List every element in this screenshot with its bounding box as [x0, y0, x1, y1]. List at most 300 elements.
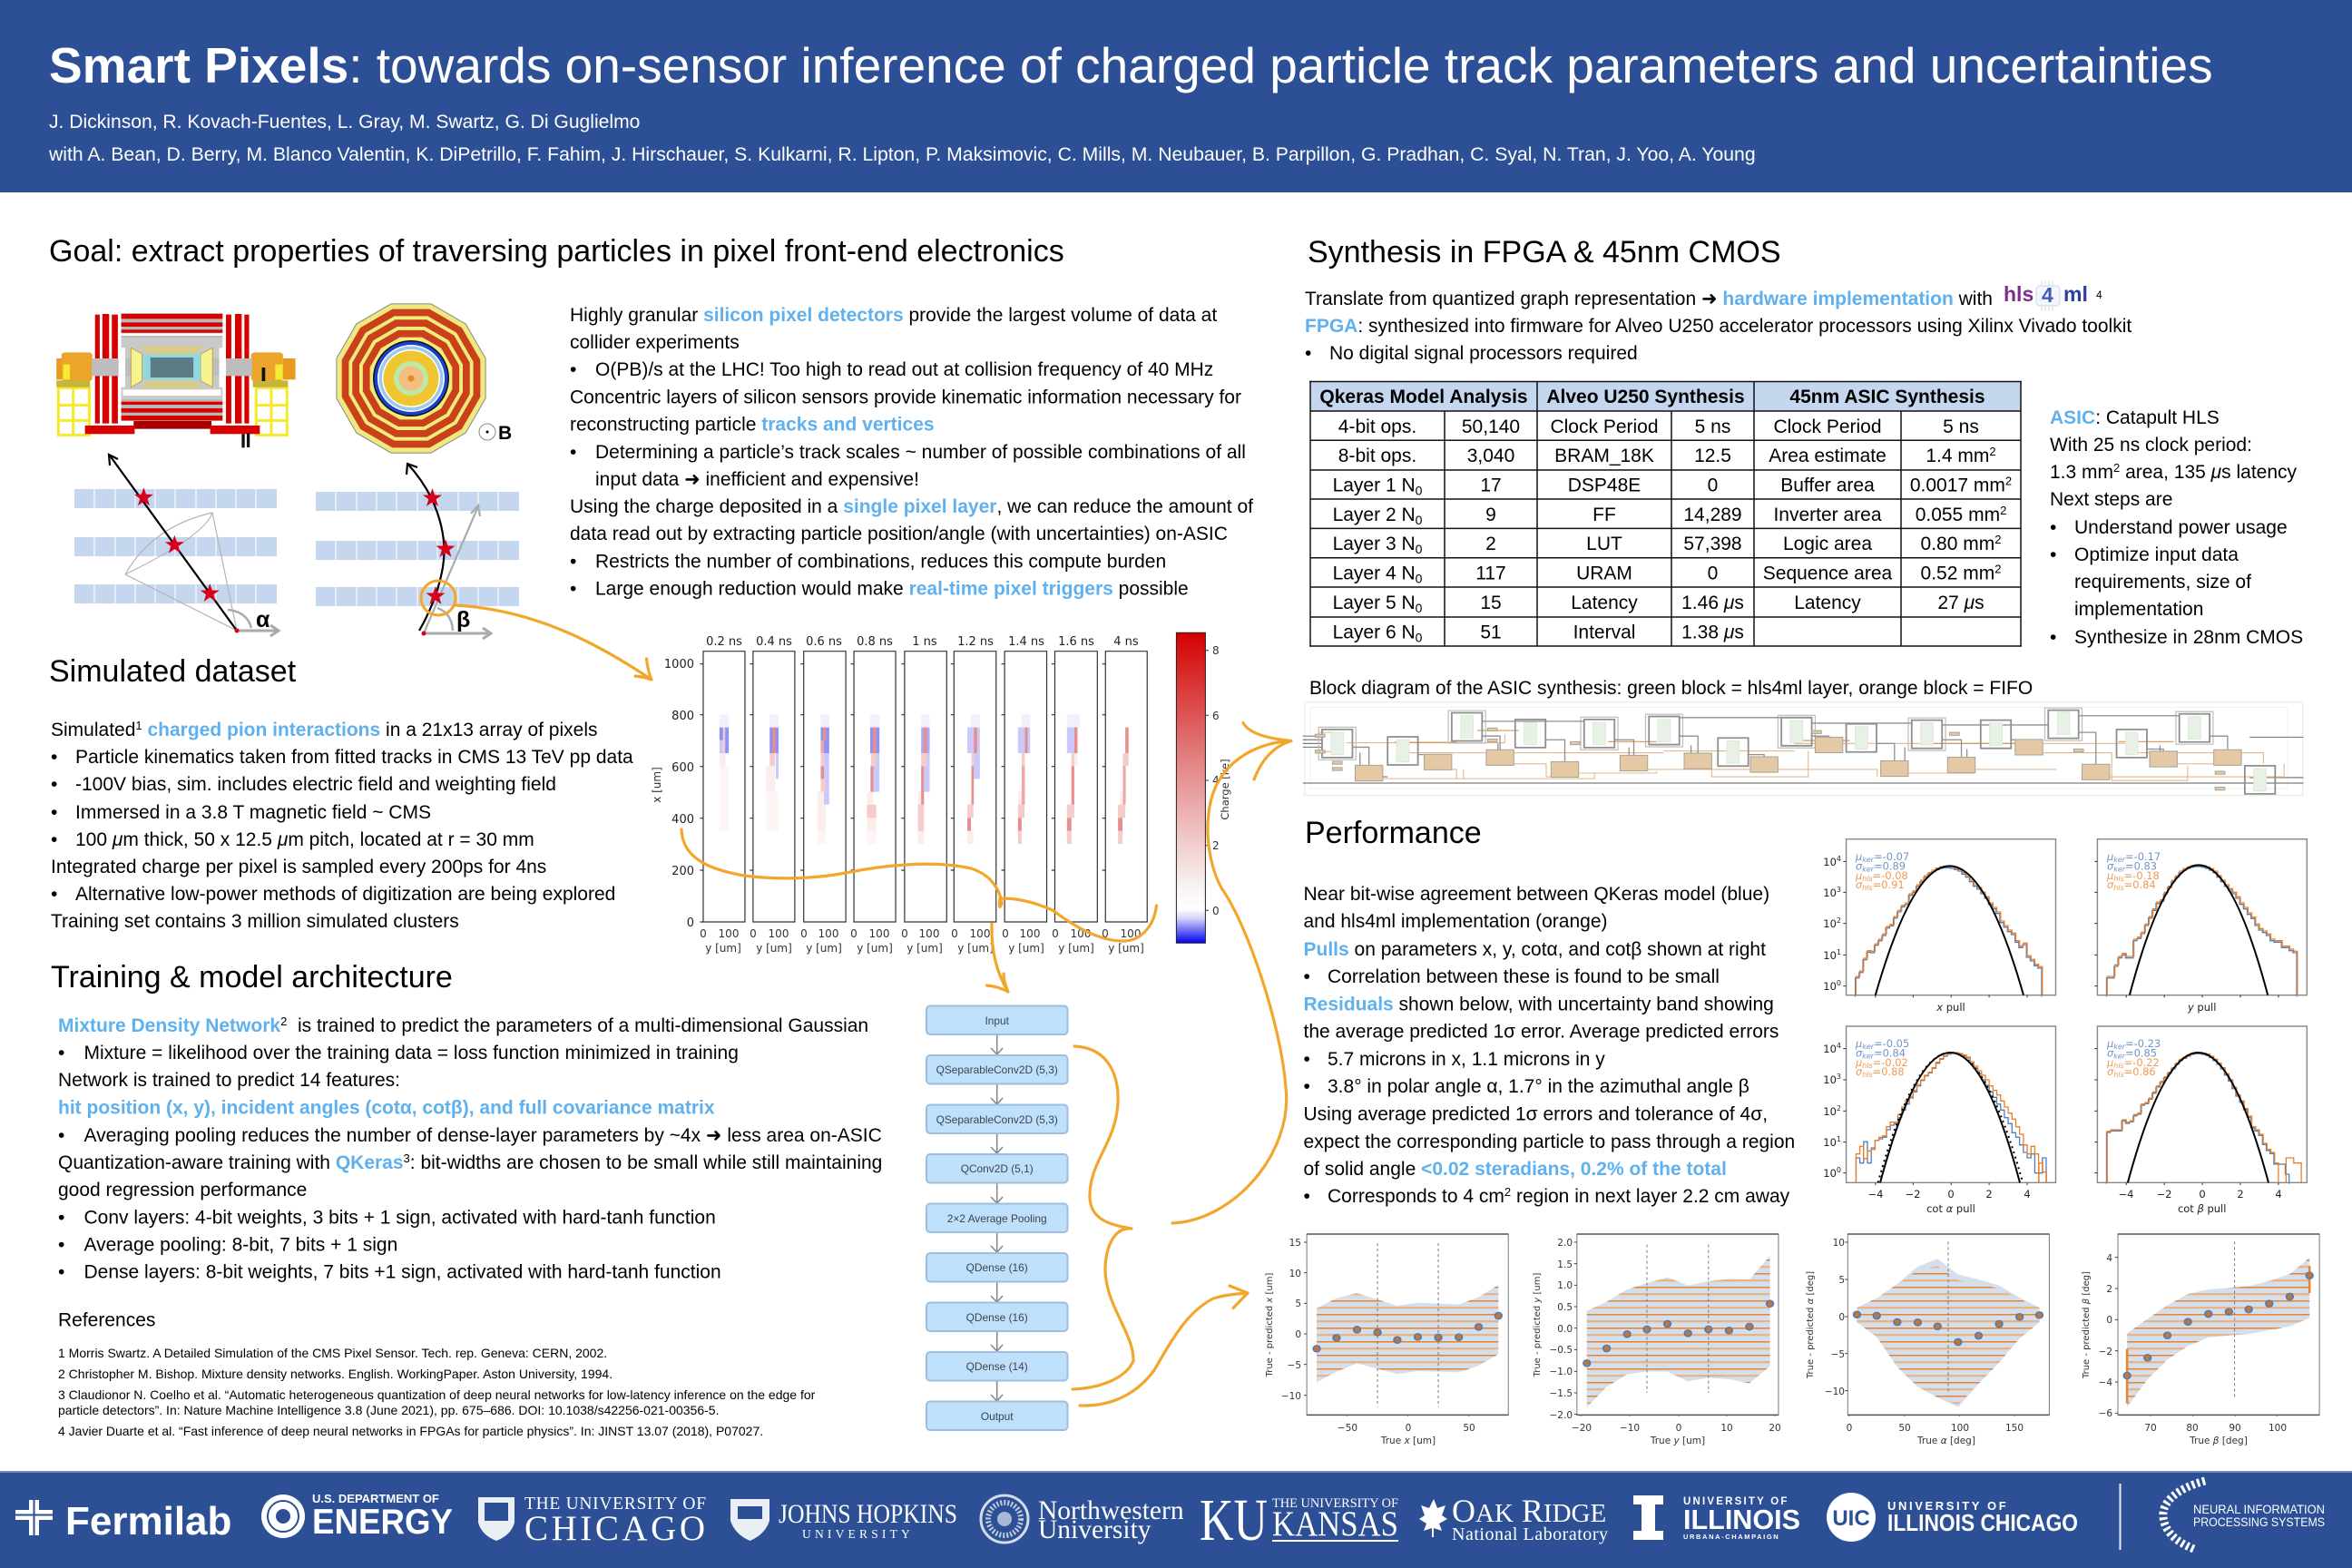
heading: simulated dataset: Simulated dataset — [49, 654, 297, 689]
text block: performance: of solid angle <0.02 steradians, 0.2% of the total — [1303, 1159, 1727, 1180]
text block: goal: • — [570, 359, 576, 380]
arrow: pixel layer to heatmap — [456, 605, 652, 680]
pull histogram axes: 4 — [2024, 1188, 2031, 1200]
heatmap x axis: 100 — [919, 927, 939, 940]
text block: ASIC next steps: With 25 ns clock period: — [2050, 435, 2252, 456]
Johns Hopkins logo: UNIVERSITY — [802, 1527, 914, 1541]
references — [58, 1310, 816, 1438]
residual x axes: −5 — [1288, 1360, 1301, 1371]
results table — [1309, 381, 2022, 646]
table column: ASIC synthesis: 2 — [1989, 445, 1996, 458]
heatmap x axis: 0 — [951, 927, 958, 940]
track diagram: alpha: α — [256, 607, 270, 632]
hls4ml logo: ml — [2063, 282, 2088, 306]
table column: ASIC synthesis: Area estimate — [1769, 446, 1886, 466]
text block: ASIC next steps: • — [2050, 627, 2056, 648]
pull histogram axes: −4 — [2119, 1188, 2133, 1200]
table header: Qkeras Model Analysis — [1319, 387, 1528, 407]
pull fit statistics: =0.85 — [2125, 1047, 2157, 1060]
pull histograms — [1823, 839, 2307, 1215]
table column: ASIC synthesis — [1763, 416, 2012, 613]
text block: performance: • — [1303, 1049, 1310, 1070]
residual alpha axes: 10 — [1833, 1238, 1845, 1249]
text block: synthesis: FPGA: synthesized into firmware for Alveo U250 accelerator processors using Xilinx Vivado toolkit — [1305, 316, 2132, 337]
University of Kansas logo — [1200, 1487, 1398, 1553]
table column: ASIC synthesis: 27 μs — [1937, 593, 1984, 613]
track diagram: beta: β — [456, 607, 470, 632]
text block: performance: • — [1303, 1076, 1310, 1097]
heatmap x axis: y [um] — [1008, 942, 1044, 955]
pull fit statistics: =0.84 — [1874, 1047, 1906, 1060]
heatmap x axis: y [um] — [957, 942, 994, 955]
pull fit statistics: =0.83 — [2125, 860, 2157, 873]
residual plots — [1265, 1234, 2319, 1446]
table column: ASIC synthesis: 0.055 mm — [1916, 505, 2000, 525]
pull histogram axes: cot α pull — [1926, 1202, 1975, 1215]
residual x axes: 50 — [1463, 1423, 1475, 1434]
text block: training: is trained to predict the parameters of a multi-dimensional Gaussian — [287, 1015, 868, 1036]
table column: ASIC synthesis: Buffer area — [1780, 475, 1875, 495]
text block: performance: region in next layer 2.2 cm away — [1511, 1186, 1790, 1207]
pull histogram axes: 10 — [1823, 1073, 1837, 1086]
text block: goal: input data ➜ inefficient and expensive! — [595, 469, 919, 490]
heatmap y axis: 800 — [671, 710, 694, 723]
DOE logo: U.S. DEPARTMENT OF — [312, 1492, 439, 1505]
pull histogram axes: 1 — [1837, 1135, 1841, 1143]
residual beta axes: −2 — [2099, 1347, 2112, 1357]
hls4ml logo: hls — [2004, 282, 2034, 306]
table column: Alveo synthesis: BRAM_18K — [1554, 446, 1654, 466]
arrow: heatmap curve — [681, 829, 1156, 941]
University of Illinois logo: UNIVERSITY OF — [1683, 1496, 1789, 1507]
residual y axes: 1.5 — [1557, 1259, 1573, 1270]
pull fit statistics: σ — [2107, 878, 2114, 891]
text block: training: Quantization-aware training with QKeras — [58, 1152, 404, 1173]
residual y axes: 10 — [1720, 1423, 1733, 1434]
text block: training: 3 — [404, 1152, 410, 1165]
pull histogram axes: 2 — [2237, 1188, 2244, 1200]
table column: Alveo synthesis: 0 — [1708, 475, 1718, 495]
table column: ASIC synthesis: 2 — [2000, 504, 2006, 517]
heatmap titles: 1.2 ns — [957, 635, 994, 649]
pull fit statistics: μ — [1855, 1037, 1862, 1050]
pull fit statistics: ker — [1862, 866, 1875, 873]
pull fit statistics: =0.89 — [1874, 860, 1906, 873]
Fermilab logo: Fermilab — [65, 1499, 231, 1544]
green hls4ml blocks — [1331, 712, 2266, 791]
colorbar: 2 — [1212, 839, 1220, 852]
pull histogram axes: 10 — [1823, 887, 1837, 899]
residual y axes: −1.0 — [1550, 1367, 1573, 1377]
residual alpha axes: 100 — [1951, 1423, 1969, 1434]
heatmap x axis: 100 — [869, 927, 889, 940]
table column: Alveo synthesis: Latency — [1571, 593, 1638, 613]
cot alpha pull — [1856, 1053, 2046, 1182]
residual y band — [1587, 1245, 1770, 1407]
heatmap y axis: 0 — [687, 916, 694, 930]
text block: performance: Using average predicted 1σ errors and tolerance of 4σ, — [1303, 1103, 1768, 1125]
text block: training: Dense layers: 8-bit weights, 7 bits +1 sign, activated with hard-tanh function — [83, 1261, 721, 1283]
text block: training: • — [58, 1261, 64, 1283]
pull fit statistics: hls — [1862, 1062, 1873, 1070]
pull histogram axes: 3 — [1837, 886, 1841, 894]
pull histogram axes: x pull — [1936, 1001, 1965, 1014]
heatmap panel frames — [700, 652, 1147, 922]
pull fit statistics: μ — [2106, 869, 2113, 882]
pull fit statistics: ker — [2113, 1043, 2126, 1051]
heatmap x axis — [700, 927, 1144, 955]
text block: synthesis — [1305, 289, 2132, 364]
residual beta axes: 2 — [2106, 1284, 2112, 1295]
text block: performance: Corresponds to 4 cm — [1328, 1185, 1790, 1207]
text block: simulated dataset: • — [51, 884, 57, 905]
residual beta axes: True β [deg] — [2189, 1436, 2248, 1446]
residual x band — [1317, 1243, 1498, 1407]
University of Chicago logo: CHICAGO — [524, 1509, 705, 1548]
residual alpha axes: 150 — [2005, 1423, 2024, 1434]
table column: model analysis: 0 — [1416, 572, 1423, 586]
text block: simulated dataset: • — [51, 829, 57, 850]
pull fit statistics: σ — [2107, 860, 2114, 873]
text block: ASIC next steps: ASIC: Catapult HLS — [2050, 407, 2220, 428]
DOE logo — [261, 1492, 453, 1542]
text block: simulated dataset: 1 — [135, 719, 142, 732]
heatmap x axis: y [um] — [756, 942, 792, 955]
references: particle detectors”. In: Nature Machine Intelligence 3.8 (June 2021), pp. 675–686. DOI: 10.1038/s42256-021-00356-5. — [58, 1403, 719, 1417]
residual y axes — [1533, 1238, 1781, 1446]
heatmap titles — [706, 635, 1139, 649]
table column: model analysis: 0 — [1416, 630, 1423, 644]
table column: Alveo synthesis: 5 ns — [1695, 416, 1730, 437]
residual x axes: 10 — [1289, 1269, 1301, 1279]
table column: model analysis: 9 — [1485, 505, 1496, 525]
table column: ASIC synthesis: 1.4 mm — [1926, 446, 1989, 466]
flowchart: model architecture: QDense (14) — [966, 1360, 1028, 1373]
table column: ASIC synthesis: 2 — [1994, 563, 2001, 575]
histogram lines — [1843, 839, 2307, 1185]
flowchart: model architecture: QDense (16) — [966, 1311, 1028, 1324]
residual y axes: 2.0 — [1557, 1238, 1573, 1249]
text block: simulated dataset: • — [51, 774, 57, 795]
text block: goal: data read out by extracting particle position/angle (with uncertainties) on-ASIC — [570, 524, 1228, 544]
heatmap titles: 1.4 ns — [1008, 635, 1044, 649]
pull fit statistics: =0.88 — [1873, 1065, 1905, 1078]
residual beta axes: −4 — [2099, 1377, 2112, 1388]
table column: model analysis: 117 — [1475, 563, 1506, 584]
text block: training: • — [58, 1125, 64, 1146]
heatmap x axis: 0 — [1052, 927, 1059, 940]
table column: model analysis: 3,040 — [1467, 446, 1514, 466]
pull histogram axes: 0 — [1837, 979, 1841, 987]
table column: ASIC synthesis: 0.0017 mm — [1910, 475, 2005, 495]
University of Illinois logo: ILLINOIS — [1683, 1504, 1800, 1535]
pull fit statistics — [1855, 850, 2161, 1079]
text block: ASIC next steps: 2 — [2113, 461, 2120, 475]
table header: 45nm ASIC Synthesis — [1789, 387, 1985, 407]
pull histogram axes: 4 — [1837, 855, 1841, 863]
heatmap x axis: 0 — [750, 927, 757, 940]
heatmap x axis: 0 — [800, 927, 808, 940]
flowchart: model architecture: QSeparableConv2D (5,3) — [936, 1113, 1058, 1126]
text block: simulated dataset: Particle kinematics taken from fitted tracks in CMS 13 TeV pp data — [75, 747, 633, 768]
pull histogram axes: 4 — [2275, 1188, 2282, 1200]
block diagram of ASIC synthesis — [1303, 702, 2303, 795]
CMS side view detector icon — [56, 313, 296, 447]
pull fit statistics: ker — [1862, 856, 1875, 864]
heatmap x axis: 100 — [1121, 927, 1141, 940]
pull fit statistics: μ — [1855, 850, 1862, 863]
Johns Hopkins logo: JOHNS HOPKINS — [779, 1499, 957, 1529]
text block: performance: the average predicted 1σ error. Average predicted errors — [1303, 1022, 1779, 1042]
heatmap x axis: 100 — [769, 927, 789, 940]
residual beta band — [2127, 1241, 2309, 1407]
residual beta axes: 0 — [2106, 1315, 2112, 1326]
text block: goal: reconstructing particle tracks and vertices — [570, 415, 935, 436]
text block: goal: Concentric layers of silicon sensors provide kinematic information necessary for — [570, 387, 1241, 408]
text block: ASIC next steps: • — [2050, 517, 2056, 538]
text block: ASIC next steps: • — [2050, 544, 2056, 565]
text block: ASIC next steps: implementation — [2074, 599, 2203, 620]
pull histogram axes: −2 — [2157, 1188, 2171, 1200]
pull histogram axes — [1823, 855, 2282, 1215]
table column: model analysis: 4-bit ops. — [1338, 416, 1416, 437]
text block: performance: • — [1303, 1186, 1310, 1207]
colorbar — [1176, 632, 1231, 943]
residual y axes: −10 — [1620, 1423, 1640, 1434]
text block: performance: 2 — [1504, 1185, 1511, 1199]
authors: J. Dickinson, R. Kovach-Fuentes, L. Gray, M. Swartz, G. Di Guglielmo — [49, 112, 640, 132]
text block: simulated dataset: Immersed in a 3.8 T magnetic field ~ CMS — [75, 802, 431, 823]
colorbar: 6 — [1212, 710, 1220, 722]
track diagram: alpha — [74, 455, 279, 636]
heatmap x axis: y [um] — [806, 942, 842, 955]
table column: model analysis: 0 — [1416, 513, 1423, 527]
heatmap x axis: y [um] — [705, 942, 741, 955]
table column: Alveo synthesis: 1.46 μs — [1681, 593, 1744, 613]
table header — [1319, 387, 1985, 407]
residual y axes: 20 — [1769, 1423, 1781, 1434]
table column: model analysis: 0 — [1416, 483, 1423, 497]
pull fit statistics: =0.86 — [2124, 1065, 2156, 1078]
orange wires — [1318, 732, 2284, 780]
residual y axes: −0.5 — [1550, 1345, 1573, 1356]
residual x axes: 0 — [1406, 1423, 1411, 1434]
pull fit statistics: μ — [1855, 869, 1862, 882]
heatmap x axis: y [um] — [906, 942, 943, 955]
text block: ASIC next steps: μs latency — [2211, 462, 2297, 483]
text block: goal: Determining a particle’s track scales ~ number of possible combinations of all — [595, 442, 1246, 463]
pull histogram axes: 1 — [1837, 948, 1841, 956]
residual y axes: 0 — [1676, 1423, 1681, 1434]
text block: simulated dataset: • — [51, 747, 57, 768]
table column: model analysis: Layer 3 N — [1333, 534, 1416, 554]
residual x axes: True x [um] — [1380, 1436, 1436, 1446]
flowchart: model architecture: QSeparableConv2D (5,3) — [936, 1063, 1058, 1076]
Northwestern logo — [981, 1495, 1184, 1544]
references: 3 Claudionor N. Coelho et al. “Automatic heterogeneous quantization of deep neural networks for low-latency inference on the edge for — [58, 1387, 816, 1402]
text block: ASIC next steps: Synthesize in 28nm CMOS — [2074, 627, 2303, 648]
table column: model analysis — [1333, 416, 1520, 644]
text block: performance — [1303, 884, 1795, 1207]
table column: ASIC synthesis: Logic area — [1783, 534, 1872, 554]
heatmap x axis: 0 — [1102, 927, 1109, 940]
pull fit statistics: hls — [2113, 875, 2124, 883]
pull fit statistics: hls — [2113, 884, 2124, 892]
Northwestern logo: Northwestern — [1038, 1496, 1184, 1525]
table column: model analysis: Layer 6 N — [1333, 622, 1416, 642]
flowchart: model architecture: QConv2D (5,1) — [961, 1162, 1034, 1175]
residual beta axes: −6 — [2099, 1408, 2112, 1419]
references: 4 Javier Duarte et al. “Fast inference of deep neural networks in FPGAs for particle physics”. In: JINST 13.07 (2018), P07027. — [58, 1424, 763, 1438]
table column: model analysis: Layer 4 N — [1333, 563, 1416, 584]
University of Kansas logo: THE UNIVERSITY OF — [1272, 1496, 1398, 1511]
table column: Alveo synthesis: FF — [1592, 505, 1616, 525]
heatmap x axis: 100 — [970, 927, 990, 940]
pull histogram axes: 10 — [1823, 856, 1837, 868]
table column: Alveo synthesis — [1550, 416, 1744, 642]
UIC logo — [1827, 1493, 2078, 1542]
heatmap titles: 0.2 ns — [706, 635, 742, 649]
Oak Ridge logo — [1419, 1493, 1608, 1544]
text block: training: Mixture Density Network — [58, 1015, 280, 1036]
text block: training: hit position (x, y), incident angles (cotα, cotβ), and full covariance matrix — [58, 1098, 715, 1118]
pull fit statistics: σ — [1856, 1065, 1863, 1078]
arrow: heatmap to flowchart — [987, 924, 1008, 992]
table column: Alveo synthesis: 12.5 — [1694, 446, 1731, 466]
text block: goal: Restricts the number of combinations, reduces this compute burden — [595, 551, 1166, 572]
text block: goal: O(PB)/s at the LHC! Too high to read out at collision frequency of 40 MHz — [595, 359, 1213, 380]
flowchart: model architecture: 2×2 Average Pooling — [947, 1212, 1047, 1225]
text block: performance: 3.8° in polar angle α, 1.7° in the azimuthal angle β — [1328, 1076, 1749, 1097]
residual alpha axes: 0 — [1838, 1312, 1845, 1323]
text block: simulated dataset: • — [51, 802, 57, 823]
residual y axes: 0.5 — [1557, 1302, 1573, 1313]
references: References — [58, 1310, 155, 1330]
NeurIPS logo — [2120, 1481, 2325, 1550]
pull histogram axes: 0 — [1837, 1166, 1841, 1174]
text block: simulated dataset: Integrated charge per pixel is sampled every 200ps for 4ns — [51, 857, 546, 877]
heatmap titles: 0.8 ns — [857, 635, 893, 649]
table column: ASIC synthesis: Sequence area — [1763, 563, 1893, 584]
table column: model analysis: 0 — [1416, 542, 1423, 556]
table column: Alveo synthesis: LUT — [1586, 534, 1622, 554]
heatmap x axis: y [um] — [1058, 942, 1094, 955]
pull histogram axes: 3 — [1837, 1073, 1841, 1081]
text block: synthesis: • — [1305, 343, 1311, 364]
hls4ml logo — [2004, 280, 2102, 311]
table column: ASIC synthesis: 5 ns — [1943, 416, 1979, 437]
University of Kansas logo: KU — [1200, 1487, 1268, 1553]
text block: ASIC next steps: Optimize input data — [2074, 544, 2239, 565]
table column: ASIC synthesis: Latency — [1794, 593, 1861, 613]
text block: training: good regression performance — [58, 1180, 307, 1200]
table column: model analysis: Layer 1 N — [1333, 475, 1416, 495]
text block: performance: Correlation between these is found to be small — [1328, 966, 1720, 987]
residual y axes: −20 — [1572, 1423, 1592, 1434]
table column: Alveo synthesis: Clock Period — [1550, 416, 1659, 437]
magnetic field symbol: B — [498, 423, 512, 444]
text block: ASIC next steps: Understand power usage — [2074, 517, 2288, 538]
text block: simulated dataset: Alternative low-power methods of digitization are being explored — [75, 884, 615, 905]
block diagram caption: Block diagram of the ASIC synthesis: green block = hls4ml layer, orange block = FIFO — [1309, 678, 2033, 699]
UIC logo: UNIVERSITY OF — [1887, 1499, 2008, 1513]
pull histogram axes: 10 — [1823, 917, 1837, 930]
University of Illinois logo — [1633, 1495, 1800, 1541]
text block: performance: Residuals shown below, with uncertainty band showing — [1303, 995, 1774, 1014]
text block: ASIC next steps — [2050, 407, 2303, 648]
pull fit statistics: σ — [1856, 1047, 1863, 1060]
text block: goal: Using the charge deposited in a single pixel layer, we can reduce the amount of — [570, 496, 1253, 517]
UIC logo: ILLINOIS CHICAGO — [1887, 1509, 2078, 1536]
table column: Alveo synthesis: 57,398 — [1683, 534, 1742, 554]
pull fit statistics: σ — [2107, 1065, 2114, 1078]
text block: training: • — [58, 1234, 64, 1256]
flowchart: model architecture: QDense (16) — [966, 1261, 1028, 1274]
residual beta axes: 4 — [2106, 1253, 2112, 1264]
table column: model analysis: 2 — [1485, 534, 1496, 554]
hls4ml logo: 4 — [2042, 283, 2053, 307]
text block: training: Network is trained to predict 14 features: — [58, 1070, 400, 1091]
pull histogram axes: 10 — [1823, 1105, 1837, 1118]
heatmap y axis: 600 — [671, 761, 694, 775]
flowchart: model architecture: Input — [985, 1014, 1010, 1027]
pull fit statistics: ker — [2113, 866, 2126, 873]
references: 1 Morris Swartz. A Detailed Simulation of the CMS Pixel Sensor. Tech. rep. Geneva: CERN, 2002. — [58, 1346, 607, 1360]
pull fit statistics: σ — [1856, 878, 1863, 891]
pull histogram axes: −4 — [1868, 1188, 1883, 1200]
NeurIPS logo: NEURAL INFORMATION — [2193, 1503, 2325, 1516]
pull histogram axes: 2 — [1837, 1104, 1841, 1112]
heatmap x axis: 100 — [1071, 927, 1091, 940]
text block: training — [58, 1014, 882, 1283]
pull fit statistics: =-0.05 — [1874, 1037, 1909, 1050]
pull fit statistics: ker — [1862, 1043, 1875, 1051]
heatmap titles: 1 ns — [912, 635, 937, 649]
charge heatmap chart — [651, 632, 1231, 955]
pull fit statistics: hls — [1862, 875, 1873, 883]
pull fit statistics: =0.91 — [1873, 878, 1905, 891]
UIC logo: UIC — [1832, 1506, 1870, 1531]
residual beta axes: 70 — [2144, 1423, 2157, 1434]
residual alpha axes: −10 — [1825, 1387, 1845, 1397]
University of Chicago logo — [478, 1494, 707, 1548]
text block: goal: Large enough reduction would make real-time pixel triggers possible — [595, 579, 1189, 599]
text block: simulated dataset: Simulated — [51, 720, 135, 740]
heatmap x axis: y [um] — [1108, 942, 1144, 955]
text block: goal — [570, 305, 1253, 599]
Oak Ridge logo: National Laboratory — [1452, 1524, 1608, 1544]
references: 2 Christopher M. Bishop. Mixture density networks. English. WorkingPaper. Aston University, 1994. — [58, 1367, 612, 1381]
residual x axes — [1265, 1238, 1475, 1446]
pull histogram axes: 2 — [1985, 1188, 1993, 1200]
residual beta axes: 100 — [2269, 1423, 2287, 1434]
residual x axes: 5 — [1295, 1298, 1301, 1309]
text block: goal: • — [570, 551, 576, 572]
table column: Alveo synthesis: URAM — [1576, 563, 1632, 584]
pull fit statistics: =-0.23 — [2125, 1037, 2161, 1050]
footer banner — [0, 1471, 2352, 1568]
text block: goal: collider experiments — [570, 332, 740, 353]
colorbar: 4 — [1212, 774, 1220, 787]
residual alpha axes: 5 — [1838, 1275, 1845, 1286]
residual y axes: 0.0 — [1557, 1324, 1573, 1335]
heatmap x axis: 100 — [719, 927, 739, 940]
orange highlight circle — [421, 581, 456, 615]
text block: performance: expect the corresponding particle to pass through a region — [1303, 1132, 1795, 1152]
text block: performance: Pulls on parameters x, y, cotα, and cotβ shown at right — [1303, 939, 1766, 960]
text block: synthesis: No digital signal processors required — [1329, 343, 1638, 364]
text block: training: Averaging pooling reduces the number of dense-layer parameters by ~4x ➜ less area on-ASIC — [83, 1125, 882, 1146]
